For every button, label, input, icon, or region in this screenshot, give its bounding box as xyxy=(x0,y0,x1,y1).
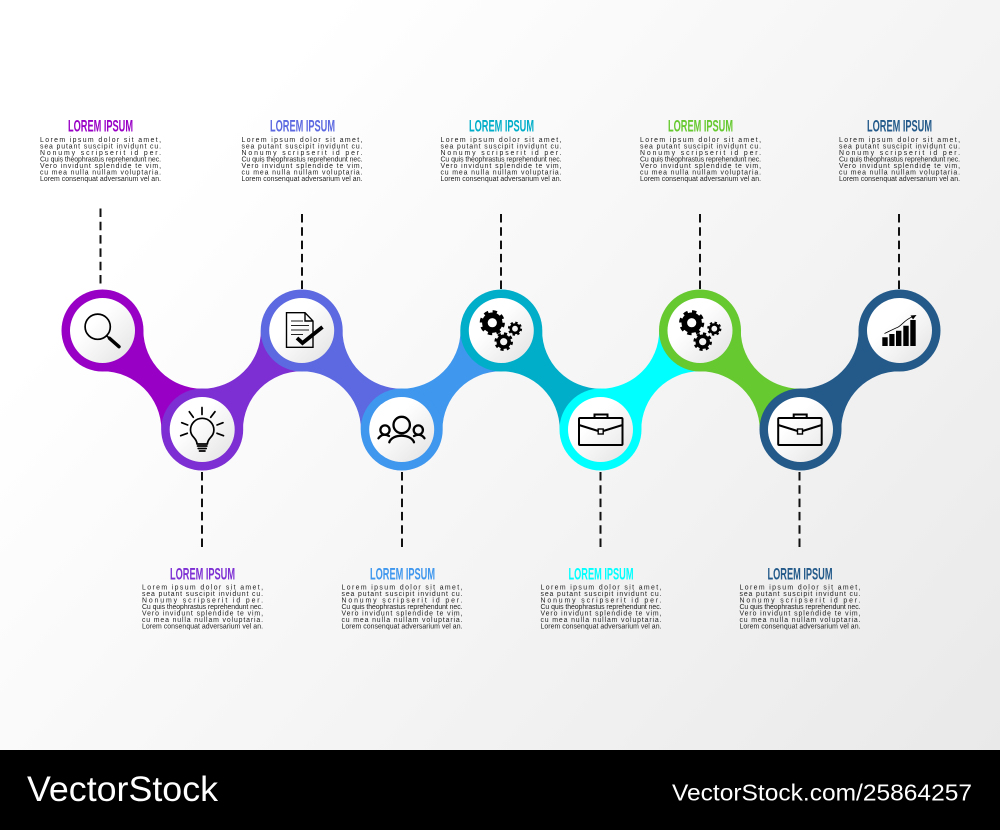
body copy: sea putant suscipit invidunt cu. xyxy=(440,143,562,150)
body copy: Vero invidunt splendide te vim, xyxy=(242,163,363,170)
heading: LOREM IPSUM xyxy=(170,565,235,583)
node 7: settings xyxy=(659,290,741,372)
body copy xyxy=(540,584,662,630)
connector: step 5 to step 6 xyxy=(501,330,600,430)
text block: step 1 xyxy=(40,118,161,183)
heading: LOREM IPSUM xyxy=(568,565,634,583)
body copy: Vero invidunt splendide te vim, xyxy=(440,163,562,170)
body copy: cu mea nulla nullam voluptaria. xyxy=(242,170,363,176)
body copy: sea putant suscipit invidunt cu. xyxy=(342,591,463,598)
heading: LOREM IPSUM xyxy=(370,565,435,583)
body copy: Lorem consenquat adversarium vel an. xyxy=(40,176,161,183)
body copy: Cu quis theophrastus reprehendunt nec. xyxy=(142,604,263,611)
body copy xyxy=(640,137,761,183)
connector: step 4 to step 5 xyxy=(402,330,501,430)
heading: LOREM IPSUM xyxy=(270,118,335,136)
body copy: Lorem consenquat adversarium vel an. xyxy=(740,624,861,630)
body copy: cu mea nulla nullam voluptaria. xyxy=(142,617,263,624)
icon: magnifying glass xyxy=(85,314,119,347)
body copy xyxy=(142,584,263,630)
text block: step 4 xyxy=(342,565,463,630)
body copy: Nonumy scripserit id per. xyxy=(640,150,761,157)
body copy xyxy=(242,137,363,183)
heading: LOREM IPSUM xyxy=(768,565,832,583)
body copy: Lorem ipsum dolor sit amet, xyxy=(40,137,161,144)
node 6: briefcase xyxy=(560,388,642,470)
node 4: team xyxy=(361,388,443,470)
body copy: Lorem consenquat adversarium vel an. xyxy=(342,624,463,630)
icon: gears xyxy=(681,312,720,350)
node 8: briefcase xyxy=(760,388,842,470)
heading: LOREM IPSUM xyxy=(68,118,133,136)
body copy: Lorem ipsum dolor sit amet, xyxy=(242,137,363,144)
heading: LOREM IPSUM xyxy=(668,118,733,136)
body copy: Nonumy scripserit id per. xyxy=(142,597,263,604)
connector: step 8 to step 9 xyxy=(800,330,900,430)
body copy: Vero invidunt splendide te vim, xyxy=(839,163,960,170)
body copy: Cu quis theophrastus reprehendunt nec. xyxy=(839,156,960,163)
body copy: Vero invidunt splendide te vim, xyxy=(640,163,761,170)
body copy: Lorem consenquat adversarium vel an. xyxy=(839,176,960,183)
body copy: Lorem consenquat adversarium vel an. xyxy=(242,176,363,183)
body copy: cu mea nulla nullam voluptaria. xyxy=(839,170,960,176)
body copy: cu mea nulla nullam voluptaria. xyxy=(640,170,761,176)
footer image id: VectorStock.com/25864257 xyxy=(672,780,972,806)
body copy: sea putant suscipit invidunt cu. xyxy=(740,591,861,598)
body copy: Lorem ipsum dolor sit amet, xyxy=(342,584,463,591)
body copy xyxy=(839,137,960,183)
body copy: Cu quis theophrastus reprehendunt nec. xyxy=(540,604,662,611)
body copy: Nonumy scripserit id per. xyxy=(242,150,363,157)
body copy: Cu quis theophrastus reprehendunt nec. xyxy=(40,156,161,163)
body copy: cu mea nulla nullam voluptaria. xyxy=(40,170,161,176)
body copy xyxy=(740,584,861,630)
body copy: Vero invidunt splendide te vim, xyxy=(342,610,463,618)
body copy: Lorem ipsum dolor sit amet, xyxy=(540,584,662,591)
footer brand: VectorStock xyxy=(27,770,219,809)
body copy: sea putant suscipit invidunt cu. xyxy=(640,143,761,150)
body copy: Lorem consenquat adversarium vel an. xyxy=(640,176,761,183)
connector: step 2 to step 3 xyxy=(202,330,302,430)
body copy: Vero invidunt splendide te vim, xyxy=(740,610,861,618)
icon: gears xyxy=(481,312,521,350)
body copy: Cu quis theophrastus reprehendunt nec. xyxy=(640,156,761,163)
body copy: Nonumy scripserit id per. xyxy=(740,597,861,604)
text block: step 8 xyxy=(740,565,861,630)
body copy: Lorem consenquat adversarium vel an. xyxy=(440,176,562,183)
body copy: cu mea nulla nullam voluptaria. xyxy=(740,617,861,624)
node 3: document xyxy=(261,290,343,372)
body copy: Lorem ipsum dolor sit amet, xyxy=(640,137,761,144)
text block: step 6 xyxy=(540,565,662,630)
node 5: settings xyxy=(460,290,542,372)
body copy: sea putant suscipit invidunt cu. xyxy=(142,591,263,598)
body copy: Cu quis theophrastus reprehendunt nec. xyxy=(342,604,463,611)
body copy: Lorem consenquat adversarium vel an. xyxy=(540,624,662,630)
footer bar xyxy=(0,750,1000,830)
body copy: cu mea nulla nullam voluptaria. xyxy=(342,617,463,624)
body copy: sea putant suscipit invidunt cu. xyxy=(839,143,960,150)
node 2: idea xyxy=(161,388,243,470)
body copy: Nonumy scripserit id per. xyxy=(40,150,161,157)
icon: light bulb xyxy=(181,408,224,451)
body copy: sea putant suscipit invidunt cu. xyxy=(242,143,363,150)
icon: briefcase xyxy=(579,414,622,445)
body copy: Lorem ipsum dolor sit amet, xyxy=(440,137,562,144)
body copy: Vero invidunt splendide te vim, xyxy=(540,610,662,618)
node 1: search xyxy=(62,290,144,372)
body copy: Vero invidunt splendide te vim, xyxy=(142,610,263,618)
body copy: Nonumy scripserit id per. xyxy=(440,150,562,157)
heading: LOREM IPSUM xyxy=(867,118,932,136)
icon: briefcase xyxy=(778,414,822,445)
body copy xyxy=(342,584,463,630)
body copy xyxy=(440,137,562,183)
body copy: Lorem ipsum dolor sit amet, xyxy=(839,137,960,144)
body copy: Nonumy scripserit id per. xyxy=(839,150,960,157)
text block: step 9 xyxy=(839,118,960,183)
connector: step 7 to step 8 xyxy=(700,330,800,430)
connector: step 6 to step 7 xyxy=(600,330,700,430)
connector: step 1 to step 2 xyxy=(102,330,202,430)
body copy: Lorem ipsum dolor sit amet, xyxy=(142,584,263,591)
icon: rising bar chart xyxy=(882,315,916,346)
text block: step 5 xyxy=(440,118,562,183)
connector: step 3 to step 4 xyxy=(302,330,402,430)
text block: step 2 xyxy=(142,565,263,630)
body copy: sea putant suscipit invidunt cu. xyxy=(40,143,161,150)
body copy: cu mea nulla nullam voluptaria. xyxy=(440,170,562,176)
body copy: cu mea nulla nullam voluptaria. xyxy=(540,617,662,624)
body copy: Nonumy scripserit id per. xyxy=(540,597,662,604)
icon: group of people xyxy=(378,417,424,442)
body copy: Lorem consenquat adversarium vel an. xyxy=(142,624,263,630)
timeline chain xyxy=(62,290,940,470)
body copy: Nonumy scripserit id per. xyxy=(342,597,463,604)
body copy: sea putant suscipit invidunt cu. xyxy=(540,591,662,598)
heading: LOREM IPSUM xyxy=(469,118,534,136)
body copy: Cu quis theophrastus reprehendunt nec. xyxy=(440,156,562,163)
icon: checked document xyxy=(286,313,322,347)
body copy: Lorem ipsum dolor sit amet, xyxy=(740,584,861,591)
body copy: Cu quis theophrastus reprehendunt nec. xyxy=(740,604,861,611)
text block: step 3 xyxy=(242,118,363,183)
body copy: Vero invidunt splendide te vim, xyxy=(40,163,161,170)
body copy xyxy=(40,137,161,183)
dashed leader lines xyxy=(100,208,899,548)
node 9: growth xyxy=(858,290,940,372)
text block: step 7 xyxy=(640,118,761,183)
body copy: Cu quis theophrastus reprehendunt nec. xyxy=(242,156,363,163)
